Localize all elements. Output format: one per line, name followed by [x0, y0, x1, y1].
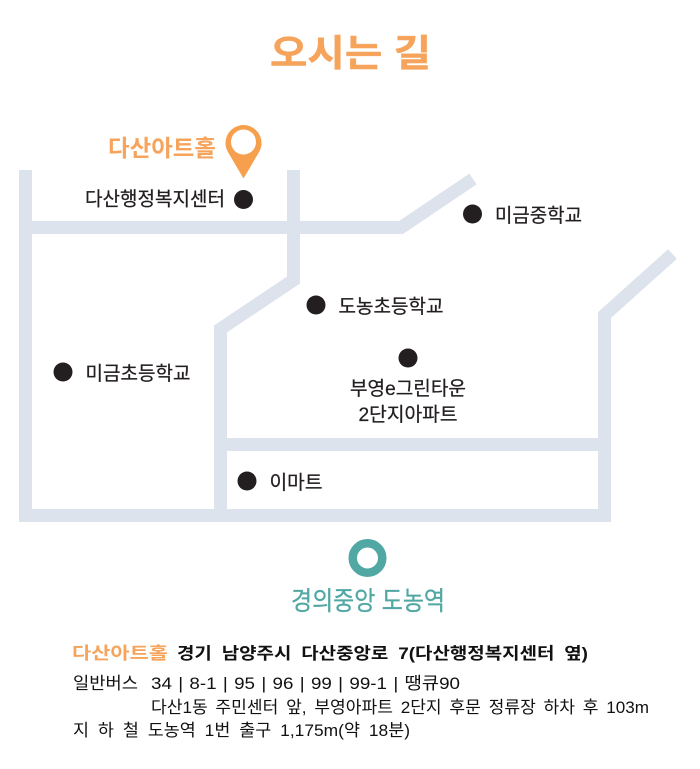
icon: orange location pin — [226, 125, 262, 178]
icon: teal station ring — [353, 543, 382, 573]
landmark: 이마트 — [238, 472, 322, 494]
landmark: 부영e그린타운 2단지아파트: 2단지아파트 — [358, 404, 458, 426]
address line: 다산아트홀 — [72, 644, 168, 663]
destination label: 다산아트홀: 다산아트홀 — [108, 135, 216, 161]
landmark: 다산행정복지센터: 다산행정복지센터 — [85, 188, 225, 210]
address block — [72, 643, 649, 740]
station label: 경의중앙 도농역: 경의중앙 도농역 — [291, 586, 445, 616]
landmark: 도농초등학교: 도농초등학교 — [338, 296, 444, 318]
landmark: 부영e그린타운 2단지아파트: 부영e그린타운 — [350, 378, 466, 400]
address block: 34 | 8-1 | 95 | 96 | 99 | 99-1 | 땡큐90 — [151, 674, 460, 693]
road map network — [26, 170, 672, 516]
bus routes: 일반버스 — [73, 674, 138, 693]
landmark: 미금중학교: 미금중학교 — [495, 205, 582, 227]
landmark: 부영e그린타운 2단지아파트 — [350, 348, 466, 426]
landmark: 이마트: 이마트 — [270, 472, 322, 494]
bus stop directions: 다산1동 주민센터 앞, 부영아파트 2단지 후문 정류장 하차 후 103m — [151, 698, 649, 717]
address block: 경기 남양주시 다산중앙로 7(다산행정복지센터 옆) — [177, 643, 588, 663]
landmark: 미금중학교 — [463, 204, 582, 227]
title: 오시는 길 — [270, 33, 431, 74]
landmark: 미금초등학교: 미금초등학교 — [86, 363, 190, 385]
subway directions: 지 하 철 도농역 1번 출구 1,175m(약 18분) — [73, 721, 410, 740]
